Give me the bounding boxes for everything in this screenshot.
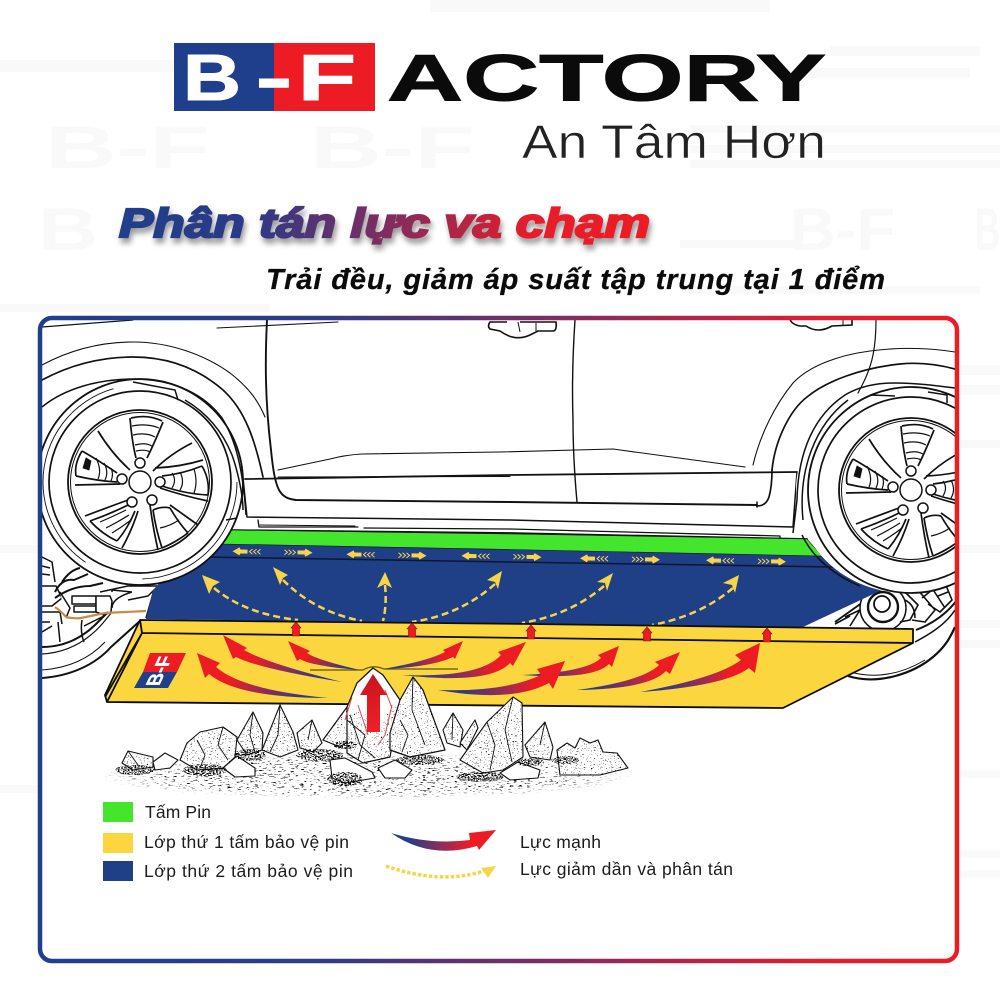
rock cracks (128, 677, 545, 770)
logo tagline: An Tâm Hơn (522, 115, 826, 168)
title: Phân tán lực va chạm (119, 200, 650, 246)
logo badge (174, 41, 375, 114)
legend: battery plate (103, 802, 211, 822)
legend: dispersed force: Lực giảm dần và phân tán (520, 859, 733, 879)
left wheel arch details (42, 379, 246, 520)
lateral force arrows in plate (232, 547, 786, 566)
small upward force arrows (291, 622, 772, 642)
logo badge: F (298, 41, 356, 114)
rock cluster right (378, 697, 628, 780)
dark grass tufts (115, 741, 579, 786)
ground texture (102, 754, 630, 798)
text: B-F (45, 114, 210, 181)
rocks (95, 668, 635, 802)
logo wordmark: ACTORY (387, 40, 826, 114)
right wheel (796, 386, 955, 594)
underbody mechanics: left (42, 550, 160, 678)
logo badge: - (256, 41, 292, 114)
door handle: rear (488, 322, 556, 338)
left wheel (37, 379, 243, 585)
panel: car underbody diagram (42, 320, 955, 798)
battery plate (green) (222, 530, 822, 556)
legend (103, 802, 733, 881)
legend: layer 1: Lớp thứ 1 tấm bảo vệ pin (144, 832, 349, 852)
mini B-F logo: B-F (142, 656, 178, 686)
dashed force arrows (202, 567, 739, 625)
strong force arrows (197, 635, 760, 698)
rock struck by impact (323, 668, 445, 763)
red stain on struck rock (345, 690, 392, 745)
impact deformation lines (310, 667, 458, 670)
panel frame (40, 318, 957, 961)
door handle: front (790, 320, 852, 330)
mini B-F logo (134, 653, 186, 688)
logo: B-Factory (174, 40, 826, 168)
text: B-F (310, 114, 475, 181)
legend: dispersed force (386, 859, 733, 879)
text: B (38, 196, 98, 263)
text: B-F (790, 196, 895, 263)
rock stipple (124, 679, 626, 775)
underbody mechanics: right (834, 586, 955, 680)
legend: layer 2: Lớp thứ 2 tấm bảo vệ pin (144, 861, 353, 881)
legend: strong force (391, 830, 601, 852)
layer 2 protection plate (blue) (146, 541, 882, 627)
subtitle: Trải đều, giảm áp suất tập trung tại 1 điểm (266, 264, 885, 296)
right wheel arch details (793, 383, 955, 586)
layer 1 protection plate (yellow) (105, 620, 913, 708)
car body line art (42, 320, 955, 541)
legend: battery plate: Tấm Pin (145, 802, 211, 822)
logo badge: B (183, 41, 241, 114)
rock cluster left (122, 705, 375, 783)
legend: strong force: Lực mạnh (520, 832, 601, 852)
brown wire (55, 607, 146, 618)
impact arrow (360, 674, 387, 732)
